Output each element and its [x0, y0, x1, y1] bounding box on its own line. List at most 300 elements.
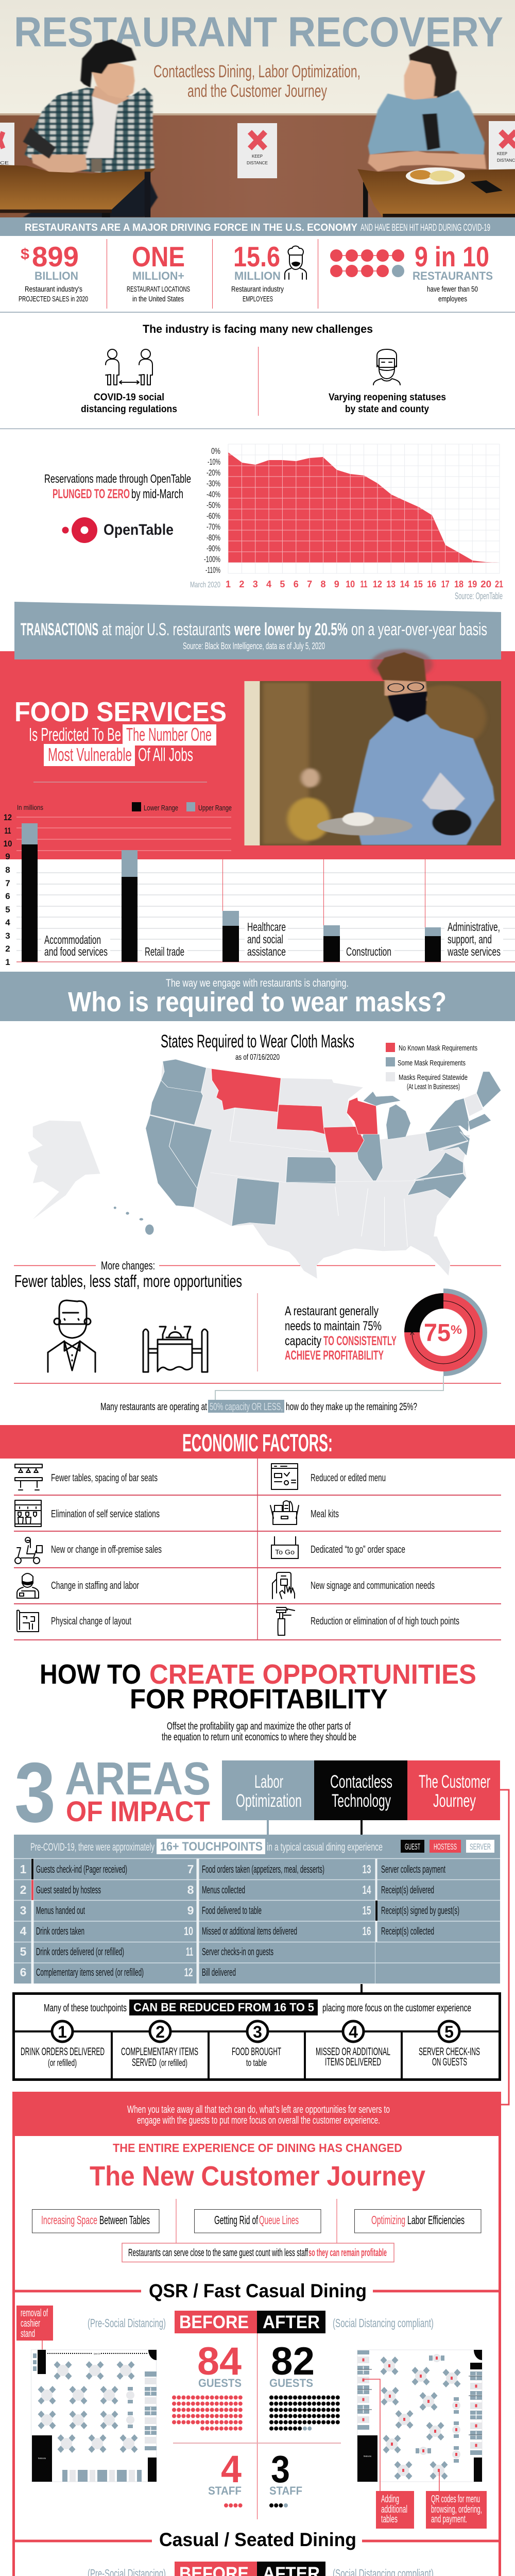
bar labels: and food services: [44, 945, 108, 958]
touchpoint labels: Receipt(s) delivered: [381, 1885, 434, 1896]
red section background: [0, 651, 515, 859]
stat: one million: MILLION+: [132, 269, 184, 282]
connector arrow: [215, 1376, 443, 1400]
text: covid-19 regulations: COVID-19 social: [94, 392, 164, 403]
icon: phone and hand: [272, 1572, 295, 1599]
text: 75% capacity: TO CONSISTENTLY: [323, 1334, 397, 1348]
touchpoint numbers: 11: [186, 1945, 193, 1958]
y axis numbers: 6: [5, 891, 10, 901]
factors text: Fewer tables, spacing of bar seats: [51, 1472, 158, 1484]
x axis labels: 5: [280, 579, 285, 589]
icon: masked person: [373, 349, 400, 385]
box: queue lines: [195, 2209, 321, 2233]
text: 75% capacity: capacity: [285, 1334, 321, 1348]
map heading: States Required to Wear Cloth Masks: [161, 1031, 354, 1052]
x axis labels: 12: [373, 579, 382, 589]
text: reservations plunged: PLUNGED TO ZERO: [53, 487, 130, 501]
touchpoint numbers: 2: [20, 1883, 26, 1896]
factors text: Reduced or edited menu: [311, 1472, 386, 1484]
y axis labels: -30%: [207, 479, 220, 488]
touchpoint numbers: 12: [184, 1965, 193, 1979]
bar labels: Construction: [346, 945, 391, 958]
y axis labels: -40%: [207, 489, 220, 499]
touchpoint numbers: 14: [363, 1883, 371, 1896]
box: labor efficiencies: [354, 2209, 481, 2233]
touchpoint labels: Receipt(s) signed by guest(s): [381, 1905, 459, 1917]
table header: [30, 1839, 494, 1854]
box: labor efficiencies: Optimizing: [371, 2213, 405, 2227]
bar labels: [41, 920, 503, 959]
box: contactless technology: Technology: [332, 1791, 391, 1811]
y axis labels: -50%: [207, 500, 220, 510]
hero photo: restaurant with two distanced diners: [0, 0, 515, 217]
stat: one million: in the United States: [132, 295, 184, 303]
keep distance signs: KEEP: [252, 154, 263, 159]
text: covid-19 regulations: [81, 392, 177, 415]
table header: HOSTESS: [434, 1842, 457, 1852]
stat: 15.6 million: EMPLOYEES: [243, 295, 273, 303]
icon: to go sign: [271, 1536, 298, 1558]
touchpoint numbers: 4: [20, 1924, 27, 1938]
donut chart: 75 percent: %: [451, 1323, 462, 1337]
before after header qsr: (Pre-Social Distancing): [88, 2316, 166, 2330]
text: offset the profitability gap: [162, 1721, 356, 1743]
touchpoint numbers: 9: [187, 1904, 194, 1917]
bar chart: jobs at risk: [3, 802, 515, 967]
map heading: as of 07/16/2020: [235, 1053, 280, 1062]
qsr guest stats: GUESTS: [269, 2377, 313, 2389]
legend: In millions: [17, 803, 43, 811]
factors text: [51, 1472, 459, 1627]
icon: menu: [271, 1464, 298, 1489]
step numbers: 5: [444, 2023, 454, 2041]
callout: serve same guest count: Restaurants can serve close to the same guest count with less staff: [128, 2247, 308, 2259]
stat: 15.6 million: [231, 241, 284, 303]
touchpoint labels: Food delivered to table: [202, 1905, 262, 1917]
y axis labels: -110%: [205, 565, 220, 575]
heading: new challenges: The industry is facing many new challenges: [143, 323, 373, 335]
bar labels: assistance: [247, 945, 286, 958]
step labels: COMPLEMENTARY ITEMS: [121, 2046, 198, 2058]
bar labels: Accommodation: [44, 933, 101, 946]
stat: $899 billion: $: [21, 246, 29, 263]
keep distance signs: CE: [0, 160, 9, 165]
icon: social distancing people: [106, 349, 152, 385]
text: reservations plunged: Reservations made through OpenTable: [44, 472, 191, 485]
before after header casual: [88, 2562, 434, 2576]
text: operating at 50 percent: 50% capacity OR LESS,: [210, 1401, 283, 1413]
connectors: [267, 1790, 509, 2105]
stat: $899 billion: PROJECTED SALES in 2020: [19, 295, 88, 303]
stat: one million: [127, 241, 190, 303]
qsr staff stats: STAFF: [208, 2484, 242, 2497]
y axis labels: [204, 446, 220, 575]
area chart: opentable reservations: [190, 444, 503, 601]
y axis numbers: 3: [5, 931, 10, 941]
box: increasing space: [32, 2209, 159, 2233]
text: 75% capacity: [285, 1304, 397, 1363]
table header: SERVER: [470, 1842, 491, 1852]
y axis labels: -20%: [207, 468, 220, 478]
touchpoint labels: Guest seated by hostess: [36, 1885, 101, 1896]
heading: more changes: [14, 1259, 501, 1291]
before after header qsr: BEFORE: [179, 2312, 249, 2332]
box: the customer journey: [407, 1760, 500, 1820]
text: reservations plunged: by mid-March: [131, 487, 183, 501]
stat: $899 billion: 899: [32, 241, 79, 273]
step labels: DRINK ORDERS DELIVERED: [21, 2046, 105, 2058]
heading: 3 areas of impact: [14, 1745, 211, 1840]
floor plan: qsr before: Restrooms: [38, 2457, 46, 2460]
box: labor optimization: Labor: [254, 1772, 283, 1792]
bar labels: Retail trade: [145, 945, 184, 958]
heading: food services: Most Vulnerable: [48, 744, 132, 765]
heading: how to create opportunities: [40, 1659, 476, 1715]
y axis numbers: 5: [5, 905, 10, 914]
icon: table setting: [143, 1327, 208, 1372]
subtitle: Contactless Dining, Labor Optimization,: [153, 62, 360, 81]
banner: major driving force: RESTAURANTS ARE A MAJOR DRIVING FORCE IN THE U.S. ECONOMY: [25, 222, 358, 233]
text: 75% capacity: A restaurant generally: [285, 1304, 379, 1318]
touchpoint numbers: 1: [20, 1862, 27, 1876]
box: labor efficiencies: Labor Efficiencies: [407, 2213, 465, 2227]
step labels: (or refilled): [159, 2058, 187, 2068]
box: the customer journey: Journey: [433, 1791, 476, 1811]
table header: Pre-COVID-19, there were approximately: [30, 1841, 154, 1853]
legend: Lower Range: [144, 804, 178, 812]
y axis labels: -90%: [207, 544, 220, 553]
heading: 3 areas of impact: AREAS: [65, 1753, 211, 1805]
reduced heading: CAN BE REDUCED FROM 16 TO 5: [133, 2001, 314, 2014]
icon: delivery scooter: [15, 1537, 42, 1564]
icon: to go sign: To Go: [275, 1548, 295, 1556]
icon: blueprint layout: [17, 1611, 39, 1632]
subtitle: and the Customer Journey: [187, 81, 327, 101]
icon: meal kit box: [270, 1501, 299, 1524]
y axis numbers: 9: [5, 852, 10, 861]
icon: masked staff: [17, 1573, 39, 1598]
heading: qsr fast casual dining: QSR / Fast Casual Dining: [149, 2280, 367, 2301]
heading: casual seated dining: Casual / Seated Dining: [159, 2529, 356, 2550]
y axis numbers: [3, 812, 12, 967]
map heading: [161, 1031, 354, 1062]
factors text: New signage and communication needs: [311, 1580, 435, 1591]
heading: 3 areas of impact: OF IMPACT: [66, 1795, 210, 1827]
step numbers: 3: [253, 2023, 262, 2041]
x axis labels: 9: [334, 579, 339, 589]
text: covid-19 regulations: distancing regulations: [81, 404, 177, 415]
step labels: FOOD BROUGHT: [232, 2046, 281, 2058]
touchpoint numbers: 15: [363, 1904, 371, 1917]
guest dots: [174, 2398, 338, 2429]
box: contactless technology: Contactless: [330, 1772, 392, 1792]
bar labels: support, and: [448, 933, 492, 946]
text: reopening statuses: Varying reopening statuses: [329, 392, 446, 403]
text: operating at 50 percent: how do they make up the remaining 25%?: [286, 1401, 417, 1413]
icon: spray bottle: [277, 1607, 295, 1635]
callout: serve same guest count: [122, 2243, 394, 2262]
stat: 9 in 10 restaurants: employees: [438, 295, 467, 303]
x axis labels: 10: [346, 579, 355, 589]
banner: who is required to wear masks: [0, 972, 515, 1021]
text: operating at 50 percent: [100, 1400, 417, 1413]
reduced heading: Many of these touchpoints: [44, 2003, 127, 2014]
touchpoint numbers: 13: [363, 1862, 371, 1876]
factors text: Dedicated “to go” order space: [311, 1544, 405, 1555]
text: offset the profitability gap: the equation to return unit economics to where they should be: [162, 1732, 356, 1743]
touchpoint numbers: 8: [187, 1883, 194, 1896]
x axis labels: 1: [226, 579, 231, 589]
text: when you take away: engage with the guests to put more focus on overall the customer experience.: [137, 2115, 380, 2126]
before after header qsr: [88, 2311, 434, 2333]
x axis labels: [226, 579, 503, 589]
y axis labels: -80%: [207, 533, 220, 543]
text: reopening statuses: by state and county: [345, 404, 429, 415]
banner: who is required to wear masks: Who is required to wear masks?: [68, 987, 447, 1018]
stat: $899 billion: [19, 241, 88, 303]
map legend: [386, 1043, 477, 1091]
banner: who is required to wear masks: The way we engage with restaurants is changing.: [166, 977, 349, 989]
panel: economic factors list: [14, 1459, 501, 1640]
callout: removal of cashier stand: removal of: [21, 2308, 48, 2319]
man at left table: [0, 39, 158, 217]
qsr staff stats: 3: [271, 2448, 290, 2490]
y axis labels: -100%: [204, 554, 220, 564]
stat: 9 in 10 restaurants: 9 in 10: [415, 241, 489, 273]
callout: removal of cashier stand: [16, 2306, 53, 2350]
touchpoint labels: Bill delivered: [202, 1967, 236, 1978]
touchpoint labels: Receipt(s) collected: [381, 1926, 434, 1937]
area chart: opentable reservations: March 2020: [190, 581, 220, 589]
x axis labels: 13: [386, 579, 396, 589]
touchpoint labels: Server checks-in on guests: [202, 1946, 273, 1958]
stats row: [19, 239, 493, 309]
icon: chef: [285, 246, 306, 279]
step labels: ITEMS DELIVERED: [325, 2056, 381, 2068]
stat: 15.6 million: 15.6: [233, 241, 280, 273]
heading: more changes: More changes:: [101, 1259, 155, 1272]
x axis labels: 2: [239, 579, 244, 589]
callout: removal of cashier stand: cashier: [21, 2318, 40, 2329]
y axis numbers: 11: [4, 826, 11, 836]
step numbers: [58, 2023, 454, 2041]
stat: one million: RESTAURANT LOCATIONS: [127, 285, 190, 294]
stat: 15.6 million: MILLION: [234, 269, 281, 282]
y axis labels: -60%: [207, 511, 220, 521]
banner: transactions lower: TRANSACTIONS: [21, 620, 98, 639]
stat: 9 in 10 restaurants: have fewer than 50: [427, 285, 478, 294]
box: queue lines: Queue Lines: [259, 2213, 299, 2227]
text: 75% capacity: ACHIEVE PROFITABILITY: [285, 1348, 384, 1363]
text: 75% capacity: needs to maintain 75%: [285, 1319, 382, 1333]
touchpoint numbers: 10: [184, 1924, 193, 1938]
keep distance signs: [0, 121, 515, 178]
x axis labels: 20: [480, 579, 491, 589]
logo: opentable: [62, 517, 174, 543]
heading: the new customer journey: THE ENTIRE EXPERIENCE OF DINING HAS CHANGED: [113, 2141, 402, 2155]
step labels: SERVED: [132, 2057, 157, 2069]
touchpoint labels: Server collects payment: [381, 1864, 445, 1875]
stat: 9 in 10 restaurants: [330, 241, 493, 303]
heading: food services: FOOD SERVICES: [14, 697, 227, 727]
touchpoint numbers: 7: [187, 1862, 194, 1876]
heading: food services: [14, 697, 227, 766]
banner: transactions lower: were lower by 20.5%: [234, 620, 348, 639]
x axis labels: 21: [495, 579, 503, 589]
panel: touchpoints table: [14, 1835, 500, 1984]
y axis numbers: 7: [5, 878, 10, 888]
x axis labels: 19: [468, 579, 477, 589]
panel: reduced from 16 to 5: [13, 1994, 500, 2079]
x axis labels: 16: [427, 579, 436, 589]
step numbers: 1: [58, 2023, 67, 2041]
bar labels: Healthcare: [247, 920, 286, 934]
floor plan: qsr after: [357, 2350, 482, 2482]
callouts: adding tables and qr codes: [363, 2379, 487, 2529]
y axis labels: 0%: [211, 446, 220, 456]
y axis numbers: 2: [5, 944, 10, 954]
heading: food services: Is Predicted To Be: [29, 724, 121, 745]
qsr staff stats: STAFF: [269, 2484, 302, 2497]
step labels: (or refilled): [48, 2058, 77, 2068]
map legend: (At Least In Businesses): [407, 1082, 460, 1091]
callout: serve same guest count: so they can remain profitable: [308, 2247, 387, 2259]
before after header qsr: (Social Distancing compliant): [333, 2316, 434, 2330]
y axis numbers: 4: [5, 918, 10, 927]
banner: transactions lower: at major U.S. restaurants: [102, 620, 231, 639]
touchpoint labels: Menus handed out: [36, 1905, 85, 1917]
factors text: Physical change of layout: [51, 1616, 131, 1627]
donut chart: 75 percent: 75: [424, 1319, 451, 1347]
touchpoint numbers: 6: [20, 1965, 26, 1979]
qsr guest stats: 82: [271, 2340, 315, 2383]
qsr guest stats: [174, 2340, 338, 2429]
touchpoint numbers: 16: [363, 1924, 371, 1938]
icon: masked waiter: [48, 1300, 95, 1372]
bar labels: and social: [247, 933, 283, 946]
x axis labels: 14: [400, 579, 409, 589]
qsr guest stats: 84: [197, 2340, 242, 2383]
x axis labels: 7: [307, 579, 312, 589]
keep distance signs: KEEP: [497, 151, 507, 156]
y axis numbers: 10: [3, 839, 12, 849]
callouts: adding tables and qr codes: tables: [381, 2514, 398, 2525]
heading: the new customer journey: The New Customer Journey: [90, 2161, 425, 2192]
heading: 3 areas of impact: 3: [14, 1745, 56, 1840]
heading: more changes: Fewer tables, less staff, more opportunities: [14, 1272, 242, 1291]
banner: transactions lower: Source: Black Box Intelligence, data as of July 5, 2020: [183, 641, 325, 651]
step circles: [52, 2021, 459, 2042]
keep distance signs: DISTANCE: [247, 160, 268, 165]
heading: the new customer journey: [90, 2141, 425, 2192]
step labels: ON GUESTS: [432, 2056, 467, 2068]
touchpoint labels: Menus collected: [202, 1885, 245, 1896]
x axis labels: 6: [294, 579, 299, 589]
logo: opentable: OpenTable: [104, 521, 174, 538]
factors text: Change in staffing and labor: [51, 1580, 139, 1591]
bars: [22, 823, 441, 962]
x axis labels: 8: [320, 579, 326, 589]
x axis labels: 4: [266, 579, 271, 589]
touchpoint labels: Drink orders taken: [36, 1926, 84, 1937]
touchpoint numbers: 5: [20, 1945, 27, 1958]
donut chart: 75 percent: [404, 1289, 487, 1376]
qsr staff stats: 4: [221, 2448, 242, 2490]
touchpoint labels: Missed or additional items delivered: [202, 1926, 297, 1937]
text: operating at 50 percent: Many restaurants are operating at: [100, 1401, 207, 1413]
floor plan: qsr after: Restrooms: [364, 2455, 372, 2458]
y axis labels: -10%: [208, 457, 220, 467]
photo: masked server with tray: [244, 649, 501, 845]
touchpoint labels: Complementary items served (or refilled): [36, 1967, 144, 1978]
woman at right table: [357, 45, 515, 217]
qsr guest stats: GUESTS: [198, 2377, 242, 2389]
box: queue lines: Getting Rid of: [214, 2213, 258, 2227]
map legend: Masks Required Statewide: [399, 1073, 468, 1082]
stat: $899 billion: Restaurant industry's: [25, 285, 82, 294]
callouts: adding tables and qr codes: additional: [381, 2504, 407, 2515]
step numbers: 4: [349, 2023, 358, 2041]
touchpoint numbers: 3: [20, 1904, 26, 1917]
banner: major driving force: [0, 217, 515, 236]
banner: economic factors: ECONOMIC FACTORS:: [182, 1430, 333, 1457]
factors text: Meal kits: [311, 1509, 339, 1520]
y axis numbers: 1: [5, 957, 10, 967]
touchpoint labels: Food orders taken (appetizers, meal, desserts): [202, 1864, 324, 1875]
touchpoint labels: Guests check-ind (Pager received): [36, 1864, 127, 1875]
callouts: adding tables and qr codes: Adding: [381, 2494, 399, 2505]
floor plan: qsr before: Queue Line: [94, 2352, 100, 2355]
banner: transactions lower: [14, 602, 501, 659]
text: when you take away: When you take away all that tech can do, what's left are opportunities for servers to: [127, 2104, 390, 2115]
legend: Upper Range: [198, 804, 232, 812]
stat: 9 in 10 restaurants: RESTAURANTS: [413, 269, 493, 282]
touchpoint labels: [36, 1864, 459, 1978]
y axis numbers: 8: [5, 865, 10, 875]
box: increasing space: Between Tables: [99, 2213, 150, 2227]
x axis labels: 17: [441, 579, 450, 589]
x axis labels: 11: [360, 579, 368, 589]
box: labor optimization: [222, 1760, 314, 1820]
step labels: [21, 2046, 480, 2069]
x axis labels: 15: [414, 579, 423, 589]
stat: $899 billion: BILLION: [35, 269, 78, 282]
factors text: New or change in off-premise sales: [51, 1544, 162, 1555]
table header: GUEST: [405, 1842, 420, 1852]
stat: one million: ONE: [132, 241, 185, 273]
map legend: Some Mask Requirements: [398, 1059, 466, 1067]
icon: ten dots: [330, 249, 404, 277]
x axis labels: 3: [253, 579, 258, 589]
step labels: to table: [246, 2058, 267, 2068]
callouts: adding tables and qr codes: and payment.: [431, 2514, 467, 2525]
touchpoint numbers: [20, 1862, 371, 1979]
floor plan: qsr before: [31, 2350, 157, 2482]
x axis labels: 18: [454, 579, 464, 589]
map legend: No Known Mask Requirements: [399, 1044, 477, 1053]
text: offset the profitability gap: Offset the profitability gap and maximize the other parts of: [167, 1721, 351, 1732]
y axis numbers: 12: [4, 812, 12, 822]
text: when you take away: [127, 2104, 390, 2126]
panel: new customer journey: [12, 2092, 501, 2576]
box: contactless technology: [314, 1760, 407, 1820]
qsr staff stats: [208, 2448, 302, 2505]
y axis labels: -70%: [207, 522, 220, 532]
heading: how to create opportunities: CREATE OPPORTUNITIES: [149, 1659, 476, 1690]
subtitle: [153, 62, 360, 101]
icon: self service station: [15, 1500, 41, 1527]
map: us states mask requirements: [28, 1059, 501, 1279]
